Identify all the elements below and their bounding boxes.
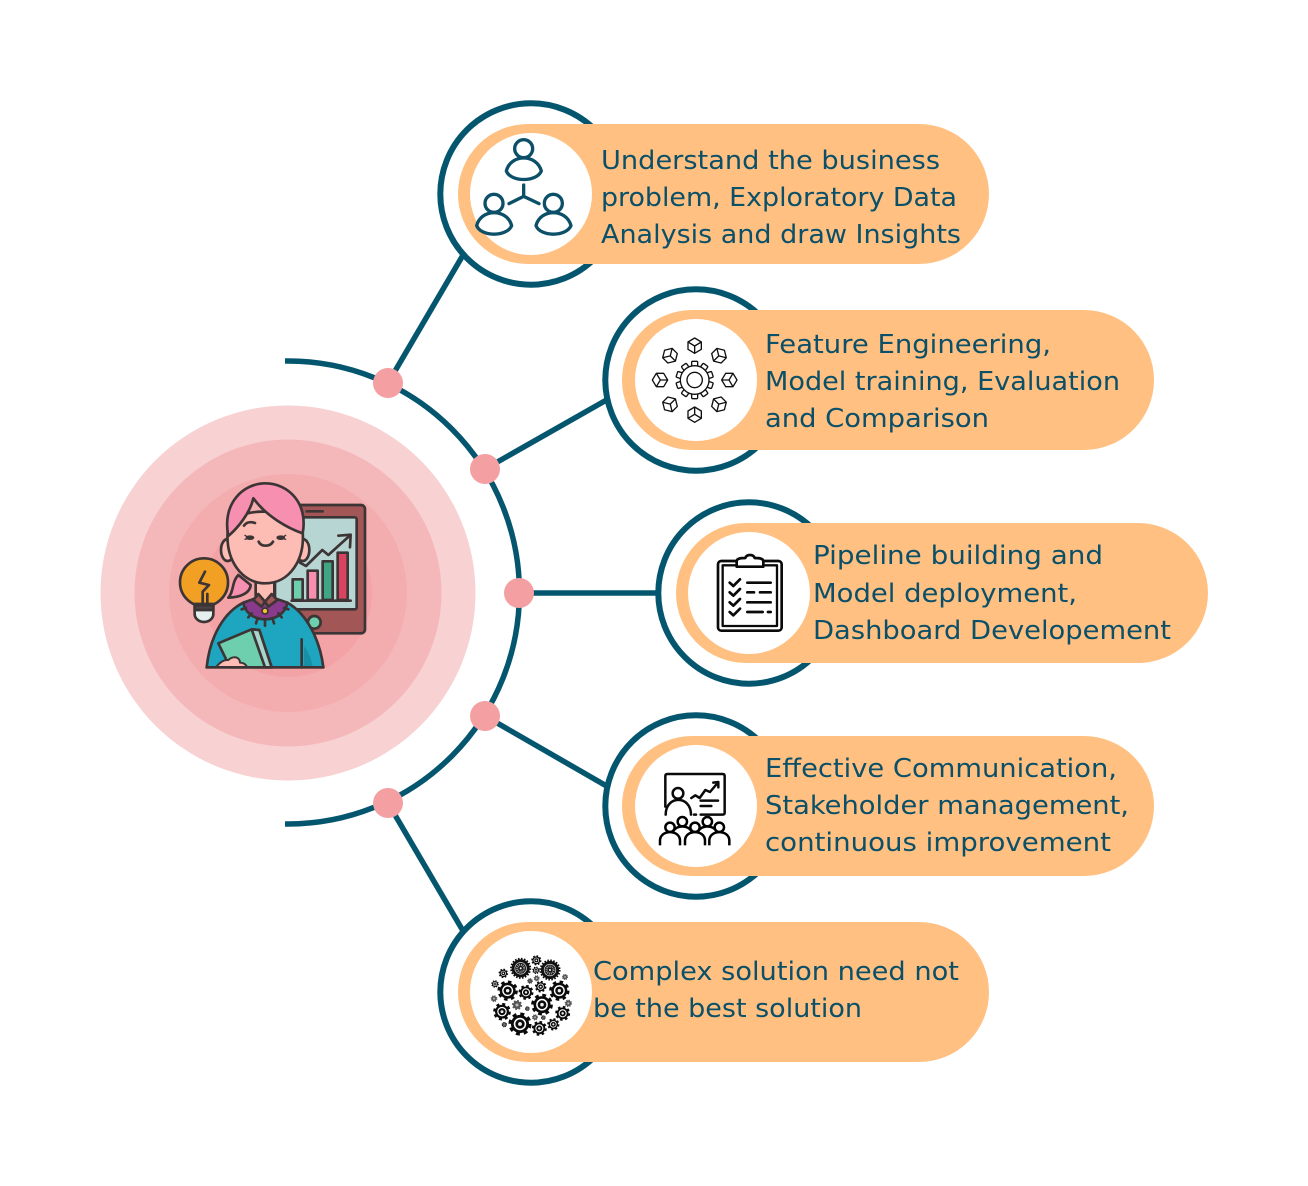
- background halo: concentric circles: [100, 406, 476, 780]
- text: Complex solution need not: [593, 957, 959, 987]
- text: Dashboard Developement: [813, 616, 1171, 646]
- text: Analysis and draw Insights: [601, 220, 961, 250]
- text: Model training, Evaluation: [765, 367, 1120, 397]
- pill: [676, 523, 1208, 663]
- text: [593, 957, 959, 1024]
- text: [765, 754, 1129, 858]
- text: and Comparison: [765, 404, 989, 434]
- panel: step 2 feature engineering: [605, 289, 1154, 471]
- icon circle: [688, 532, 810, 654]
- icon: cluster of gears: [491, 956, 572, 1035]
- icon: three connected people: [477, 140, 571, 234]
- text: Effective Communication,: [765, 754, 1117, 784]
- text: Understand the business: [601, 146, 940, 176]
- ring: [605, 715, 787, 897]
- text: continuous improvement: [765, 828, 1111, 858]
- pill: [458, 124, 989, 264]
- text: be the best solution: [593, 994, 862, 1024]
- icon: presenter and audience: [657, 774, 733, 849]
- pill: [622, 310, 1154, 450]
- text: problem, Exploratory Data: [601, 183, 957, 213]
- icon: clipboard checklist: [718, 555, 782, 631]
- connector dots: [373, 368, 534, 818]
- panel: step 4 communication: [605, 715, 1154, 897]
- icon circle: [635, 745, 757, 867]
- text: Feature Engineering,: [765, 330, 1051, 360]
- text: [813, 541, 1171, 646]
- pill: [458, 922, 989, 1062]
- illustration: analyst woman with lightbulb and chart tablet: [180, 483, 365, 667]
- ring: [440, 103, 622, 285]
- icon circle: [635, 319, 757, 441]
- text: [601, 146, 961, 250]
- icon: gear and cubes: [652, 338, 737, 422]
- pill: [622, 736, 1154, 876]
- panel: step 5 simple solutions: [440, 901, 989, 1083]
- connector lines: [388, 250, 662, 936]
- icon circle: [470, 133, 592, 255]
- central arc: [285, 361, 519, 824]
- text: Stakeholder management,: [765, 791, 1129, 821]
- text: Pipeline building and: [813, 541, 1103, 571]
- panel: step 3 pipeline and deployment: [658, 502, 1208, 684]
- icon circle: [470, 931, 592, 1053]
- text: [765, 330, 1120, 434]
- ring: [440, 901, 622, 1083]
- ring: [605, 289, 787, 471]
- panel: step 1 business understanding: [440, 103, 989, 285]
- text: Model deployment,: [813, 579, 1077, 609]
- ring: [658, 502, 840, 684]
